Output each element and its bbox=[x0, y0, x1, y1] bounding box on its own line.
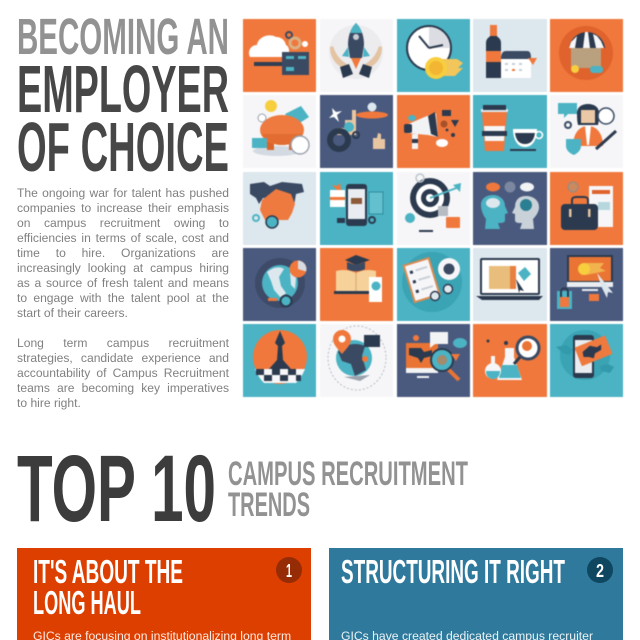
tile: briefcase and newspaper bbox=[550, 172, 623, 245]
icon grid bbox=[243, 19, 623, 397]
tile: bottle and calendar bbox=[473, 19, 547, 92]
tile: globe and location pin bbox=[320, 324, 393, 397]
text block: introduction: time to hire. Organizations are bbox=[17, 246, 229, 260]
heading: top 10: TOP 10 bbox=[17, 436, 216, 542]
text block: introduction: on campus recruitment owing to bbox=[17, 216, 229, 230]
tile: coffee cups bbox=[473, 95, 547, 168]
heading: it's about the long haul bbox=[33, 553, 183, 621]
tile: target with arrow bbox=[397, 172, 470, 245]
heading: it's about the long haul: IT'S ABOUT THE bbox=[33, 553, 183, 590]
text block: introduction: efficiencies in terms of scale, cost and bbox=[17, 231, 229, 245]
tile: flasks and magnifier bbox=[473, 324, 547, 397]
text block: introduction: as a source of fresh talent and means bbox=[17, 276, 229, 290]
tile: umbrella bbox=[550, 19, 623, 92]
title: becoming an employer of choice: EMPLOYER bbox=[17, 52, 229, 127]
text block: introduction: Long term campus recruitment bbox=[17, 336, 229, 350]
tile: two heads bbox=[473, 172, 547, 245]
text block: introduction: increasingly looking at campus hiring bbox=[17, 261, 229, 275]
text block: introduction: companies to increase their emphasis bbox=[17, 201, 229, 215]
badge: number 2 bbox=[587, 557, 613, 583]
tile: rocket in hands bbox=[320, 19, 393, 92]
text block: introduction: strategies, candidate experience and bbox=[17, 351, 229, 365]
text block: introduction: start of their careers. bbox=[17, 306, 128, 320]
subheading: campus recruitment trends: CAMPUS RECRUITMENT bbox=[228, 455, 468, 493]
panel: trend 1 bbox=[17, 548, 311, 640]
tile: stairs and gears bbox=[320, 95, 393, 168]
tile: monitor and magnifier bbox=[397, 324, 470, 397]
badge: number 1: 1 bbox=[286, 561, 292, 581]
title: becoming an employer of choice bbox=[17, 8, 229, 186]
tile: chess piece bbox=[243, 324, 316, 397]
tile: book and graduation cap bbox=[320, 248, 393, 321]
title: becoming an employer of choice: BECOMING AN bbox=[17, 8, 229, 65]
title: becoming an employer of choice: OF CHOICE bbox=[17, 108, 229, 186]
tile: laptop bbox=[473, 248, 547, 321]
tile: phone and gift bbox=[320, 172, 393, 245]
text block: introduction: teams are becoming key imperatives bbox=[17, 381, 229, 395]
badge: number 2: 2 bbox=[596, 561, 604, 581]
heading: it's about the long haul: LONG HAUL bbox=[33, 584, 141, 621]
tile: support woman bbox=[550, 95, 623, 168]
tile: phone and map card bbox=[550, 324, 623, 397]
tile: cloud and server bbox=[243, 19, 316, 92]
panel: trend 2 bbox=[329, 548, 623, 640]
tile: world map and head bbox=[243, 172, 316, 245]
subheading: campus recruitment trends bbox=[228, 455, 468, 524]
tile: megaphone bbox=[397, 95, 470, 168]
tile: desktop computer bbox=[550, 248, 623, 321]
text block: introduction bbox=[17, 186, 229, 410]
tile: globe with pie chart bbox=[243, 248, 316, 321]
tile: clipboard and glasses bbox=[397, 248, 470, 321]
text block: introduction: accountability of Campus Recruitment bbox=[17, 366, 229, 380]
text block: introduction: to engage with the talent pool at the bbox=[17, 291, 229, 305]
text block: introduction: The ongoing war for talent has pushed bbox=[17, 186, 229, 200]
badge: number 1 bbox=[276, 557, 302, 583]
text block: introduction: to hire right. bbox=[17, 396, 81, 410]
subheading: campus recruitment trends: TRENDS bbox=[228, 486, 310, 524]
tile: clock and coin bbox=[397, 19, 470, 92]
tile: piggy bank bbox=[243, 95, 316, 168]
